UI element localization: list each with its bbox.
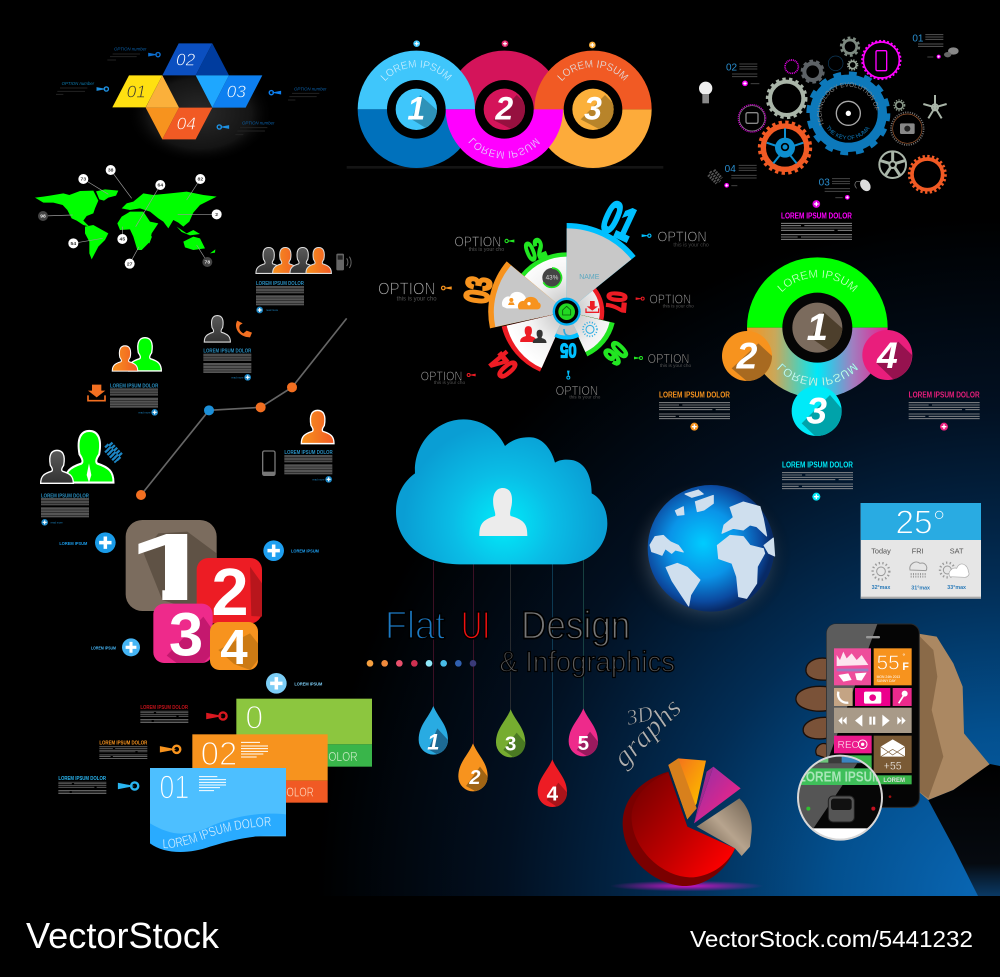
isometric 02 piece: 02	[176, 49, 196, 69]
option pin 05: OPTION	[556, 384, 598, 398]
option pin 03: OPTION	[378, 278, 435, 298]
option pin 05: this is your cho	[569, 395, 601, 400]
drop 3	[496, 709, 525, 757]
gear label 04	[724, 164, 757, 188]
cyan text block: LOREM IPSUM DOLOR	[782, 460, 853, 469]
fan numbers	[458, 191, 645, 385]
wedge 01	[567, 223, 636, 312]
map number badges: 98	[40, 214, 46, 220]
magenta text block	[781, 200, 852, 239]
option pin 07: OPTION	[649, 292, 691, 306]
isometric 03 piece: 03	[227, 82, 246, 102]
blue thin ring	[828, 56, 843, 71]
mobile and signal icon	[336, 254, 351, 270]
medallion number 4	[862, 330, 912, 380]
soft glow behind isometric diagram	[127, 63, 273, 163]
tile temperature	[874, 648, 912, 685]
drop 4: 4	[547, 783, 559, 806]
gear label 04: 04	[725, 164, 736, 175]
isometric 04 piece: 04	[177, 113, 196, 133]
map number badges	[38, 165, 222, 269]
person with phone	[204, 316, 252, 342]
option pin 06	[634, 352, 691, 368]
drop 5	[569, 708, 598, 756]
text block download	[110, 383, 158, 416]
gear label 01	[912, 33, 943, 59]
title: Flat UI Design: Flat	[385, 603, 445, 647]
wedge 07	[567, 288, 604, 320]
drop 2	[458, 743, 488, 791]
phone red led	[889, 795, 891, 798]
hand: back of hand	[917, 633, 990, 800]
weather card: 25°	[895, 504, 946, 541]
text block right: read more	[312, 477, 325, 481]
option pin 01: this is your cho	[673, 243, 709, 249]
map number badges: 27	[127, 261, 133, 267]
text block right	[284, 450, 333, 483]
text block person phone: read more	[231, 375, 244, 379]
fan numbers: 06	[598, 335, 634, 371]
sleeve	[928, 764, 1000, 897]
weather card: FRI	[912, 546, 924, 555]
mouse icon	[855, 177, 873, 193]
tile phone	[834, 688, 853, 706]
medallion curved labels	[758, 270, 896, 386]
medallion number 3	[792, 386, 842, 436]
curved labels: LOREM IPSUM	[557, 60, 629, 81]
text block person phone: LOREM IPSUM DOLOR	[203, 348, 251, 354]
phone body	[827, 624, 919, 807]
plus callouts: LOREM IPSUM	[294, 681, 322, 687]
number 3	[564, 80, 627, 139]
gauge 43%	[542, 268, 562, 287]
magenta gear with phone	[862, 41, 901, 79]
tile 4: 4	[220, 620, 248, 675]
gray gear	[767, 79, 806, 118]
tile 2	[197, 556, 262, 630]
title: Flat UI Design	[385, 603, 630, 647]
option pin 01	[642, 230, 709, 249]
gauge 43%: 43%	[546, 275, 559, 282]
blue text block: LOREM IPSUM DOLOR	[58, 776, 106, 782]
text block top	[256, 281, 304, 313]
phone icon	[564, 329, 571, 336]
drop 3: 3	[505, 733, 516, 756]
isometric 01 piece	[112, 75, 179, 108]
dark gray gear	[802, 61, 823, 82]
tile lower green	[834, 755, 872, 773]
orange person right	[301, 410, 334, 444]
option pin 01: OPTION	[657, 230, 707, 246]
tile 3	[153, 601, 213, 670]
medallion number 1	[782, 293, 852, 363]
plus callouts: LOREM IPSUM	[91, 645, 116, 651]
title: Flat UI Design: Design	[521, 603, 630, 647]
plus callouts: LOREM IPSUM	[59, 541, 87, 547]
3D graphs lettering: 3D	[623, 701, 655, 730]
map number badges: 82	[198, 177, 203, 183]
footer bar	[0, 896, 1000, 977]
orange card: OLOR	[286, 785, 314, 800]
magnifier lens: LOREM IPSUM	[799, 770, 882, 786]
tile camera	[855, 688, 890, 706]
orange text block: LOREM IPSUM DOLOR	[99, 741, 147, 747]
tile heading green: LOREM	[883, 778, 905, 784]
text block download: read more	[138, 410, 151, 414]
option pin 02: OPTION	[454, 235, 501, 251]
tile temperature: 55	[877, 651, 900, 674]
top gray gear	[841, 38, 859, 56]
panel: isometric options and world map	[35, 43, 327, 269]
blue card: LOREM IPSUM DOLOR	[163, 817, 271, 848]
isometric 01 piece: 01	[127, 81, 146, 101]
option pin 04: this is your cho	[434, 380, 465, 385]
panel: gears	[699, 33, 959, 200]
option label left: OPTION number	[62, 81, 95, 86]
weather card: SAT	[950, 546, 964, 555]
map number badges: 54	[71, 241, 76, 247]
text block top: LOREM IPSUM DOLOR	[256, 281, 304, 287]
pin red	[206, 712, 227, 720]
tile temperature: MON 24th 2013	[877, 675, 900, 679]
fan numbers: 05	[560, 339, 577, 361]
orange gear right	[909, 156, 945, 192]
plus callouts: LOREM IPSUM	[291, 549, 319, 555]
green card	[236, 699, 372, 767]
tile mail: +55	[884, 761, 902, 773]
pink text block: LOREM IPSUM DOLOR	[909, 390, 980, 399]
panel: cloud with drops and title	[367, 419, 675, 807]
option label top	[107, 47, 160, 60]
option label right	[269, 86, 327, 100]
medallion curved labels: LOREM IPSUM	[777, 363, 858, 386]
drop 2: 2	[468, 767, 481, 789]
map callout lines	[43, 170, 217, 264]
fan numbers: 07	[601, 290, 633, 313]
orange text block	[99, 741, 147, 758]
drop 4	[538, 759, 567, 807]
magenta text block: LOREM IPSUM DOLOR	[781, 212, 852, 221]
option label left	[56, 81, 108, 94]
large blue gear: TECHNOLOGY EVOLUTION OF	[817, 82, 880, 127]
option pin 02: this is your cho	[469, 247, 504, 253]
tile media player	[834, 708, 912, 733]
blue text block	[58, 776, 106, 794]
3D graphs lettering: graphs	[607, 692, 688, 773]
title: Flat UI Design: UI	[461, 603, 490, 647]
world map	[35, 165, 222, 269]
wedge 03	[488, 261, 567, 328]
option pin 07	[636, 292, 694, 308]
medallion number 4: 4	[876, 334, 898, 376]
option label right: OPTION number	[294, 86, 327, 91]
weather card: 31°max	[911, 585, 930, 591]
gear label 02	[726, 63, 759, 86]
ground shadow	[347, 166, 663, 169]
drop 5: 5	[578, 732, 589, 755]
name label: NAME	[579, 274, 600, 281]
panel: people timeline	[41, 247, 351, 526]
option pin 05	[556, 371, 601, 400]
small gear	[848, 60, 858, 70]
center hub	[553, 298, 581, 326]
map number badges: 64	[158, 183, 163, 189]
tile 3: 3	[169, 601, 203, 670]
globe halo	[625, 477, 792, 633]
medallion number 1: 1	[807, 306, 828, 349]
panel: option fan chart	[378, 191, 709, 400]
text block top: read more	[266, 308, 279, 312]
speech bubble icon	[944, 47, 959, 57]
isometric 04 piece	[146, 108, 212, 139]
cloud users icon	[502, 292, 541, 309]
3D pie chart	[610, 758, 763, 891]
hanging lines	[433, 560, 583, 762]
option pin 03: this is your cho	[397, 296, 437, 302]
curved labels: LOREM IPSUM	[380, 60, 452, 81]
medallion number 2: 2	[736, 335, 758, 377]
fan numbers: 02	[520, 232, 550, 267]
tile chart	[834, 648, 871, 685]
tile record	[834, 736, 872, 753]
smartphone outline	[263, 451, 275, 475]
tile record: REC	[838, 740, 859, 751]
fan numbers: 03	[458, 274, 500, 306]
plus dots	[413, 40, 596, 48]
tile mail	[874, 736, 912, 773]
option pin 06: OPTION	[648, 352, 689, 366]
tile heading green	[834, 775, 912, 784]
curved labels: LOREM IPSUM	[468, 138, 540, 159]
camera gear	[891, 112, 924, 145]
gear label 02: 02	[726, 63, 738, 74]
number 2: 2	[494, 90, 513, 126]
red text block: LOREM IPSUM DOLOR	[140, 705, 188, 711]
plus callouts	[59, 532, 322, 694]
tile 2: 2	[211, 556, 249, 630]
tile 1: 1	[124, 513, 222, 620]
text block lower left	[41, 493, 89, 526]
colour dots row	[367, 660, 476, 667]
medallion curved labels: LOREM IPSUM	[777, 270, 858, 292]
medallion number 2	[722, 331, 772, 381]
number 3: 3	[584, 90, 602, 126]
fan numbers: 04	[483, 345, 525, 385]
weather card: 33°max	[947, 585, 966, 591]
text block right: LOREM IPSUM DOLOR	[284, 450, 333, 456]
fan numbers: 01	[593, 191, 645, 252]
subtitle: & Infographics: & Infographics	[499, 647, 675, 679]
star wheel	[923, 95, 947, 118]
large blue gear: THE KEY OF HUMAN Beings	[826, 125, 870, 140]
option label top: OPTION number	[114, 47, 147, 52]
isometric 03 piece	[196, 75, 262, 108]
red text block	[140, 705, 188, 723]
footer url: VectorStock.com/5441232	[690, 926, 973, 952]
sun icon	[583, 322, 597, 336]
wedge 04	[502, 312, 567, 372]
cyan text block	[782, 460, 853, 501]
pin orange	[160, 746, 180, 753]
people icon	[520, 326, 547, 343]
number 1	[387, 80, 450, 139]
magnifier lens	[797, 754, 883, 841]
map number badges: 45	[120, 237, 125, 243]
download icon	[88, 385, 105, 401]
map number badges: 2	[215, 212, 218, 218]
text block lower left: LOREM IPSUM DOLOR	[41, 493, 89, 499]
option pin 06: this is your cho	[660, 363, 691, 368]
magenta gear with tablet	[738, 105, 766, 132]
wedge 05	[554, 312, 579, 340]
wedge 06	[567, 312, 615, 356]
gear label 03	[819, 177, 850, 200]
globe	[648, 485, 775, 612]
spoked wheel	[879, 151, 906, 178]
panel: three linked circles	[346, 40, 664, 168]
panel: globe, weather, pie and phone	[607, 477, 1000, 897]
curved labels	[380, 60, 629, 159]
weather card	[861, 503, 981, 599]
hand shading	[917, 637, 943, 798]
hand: fingers	[796, 658, 827, 758]
panel: numbered tiles and cards	[58, 476, 412, 852]
isometric 02 piece	[162, 43, 229, 75]
green card: OLOR	[328, 749, 358, 764]
orange text block	[659, 390, 730, 431]
weather icons	[873, 562, 969, 580]
gear label 01: 01	[912, 33, 924, 44]
map number badges: 38	[108, 168, 114, 174]
drop 1	[419, 706, 448, 755]
number 2	[475, 80, 540, 139]
tile microphone	[893, 688, 912, 706]
number 1: 1	[407, 90, 425, 126]
blue card	[150, 768, 286, 852]
option pin 04: OPTION	[421, 369, 462, 383]
map number badges: 73	[81, 177, 86, 183]
option label bottom	[217, 120, 275, 135]
gear label 03: 03	[819, 177, 830, 188]
tile 4	[210, 620, 258, 675]
gray small gear right	[894, 100, 905, 111]
tile temperature: SUNNY DAY	[877, 679, 897, 683]
option pin 07: this is your cho	[663, 303, 694, 308]
pink text block	[909, 390, 980, 431]
text block download: LOREM IPSUM DOLOR	[110, 383, 158, 389]
medallion arcs	[747, 257, 888, 398]
people group top	[256, 247, 331, 273]
pin blue	[118, 782, 138, 790]
text block lower left: read more	[51, 520, 63, 524]
orange gear with blue hub	[760, 122, 810, 173]
panel: four-part medallion	[659, 200, 980, 534]
green and gray people large	[41, 431, 114, 483]
circle segments	[358, 51, 652, 168]
bulb icon	[699, 82, 712, 103]
drop 1: 1	[427, 729, 439, 754]
text block person phone	[203, 348, 251, 381]
blue card: 01	[159, 769, 189, 806]
orange card: 02	[201, 736, 237, 773]
weather card: Today	[871, 546, 891, 555]
cloud icon	[396, 419, 607, 564]
map number badges: 78	[205, 260, 210, 266]
smartphone	[827, 624, 919, 807]
medallion number 3: 3	[806, 390, 827, 432]
footer brand: VectorStock	[26, 915, 220, 956]
small magenta gear	[785, 60, 798, 73]
tile temperature: F	[902, 661, 909, 673]
cloud user icon	[479, 488, 527, 536]
large blue gear	[806, 71, 890, 156]
pixel arrow blue	[106, 443, 122, 462]
green card: 0	[245, 699, 263, 735]
orange card	[192, 734, 328, 803]
option label bottom: OPTION number	[242, 120, 275, 125]
pixel arrow icon	[708, 170, 722, 183]
orange and green people	[112, 338, 161, 371]
download icon	[586, 301, 599, 312]
tile temperature: °	[902, 651, 905, 660]
orange text block: LOREM IPSUM DOLOR	[659, 390, 730, 399]
wedge 02	[521, 252, 567, 312]
timeline chart	[136, 318, 347, 500]
weather card: 32°max	[872, 585, 890, 591]
